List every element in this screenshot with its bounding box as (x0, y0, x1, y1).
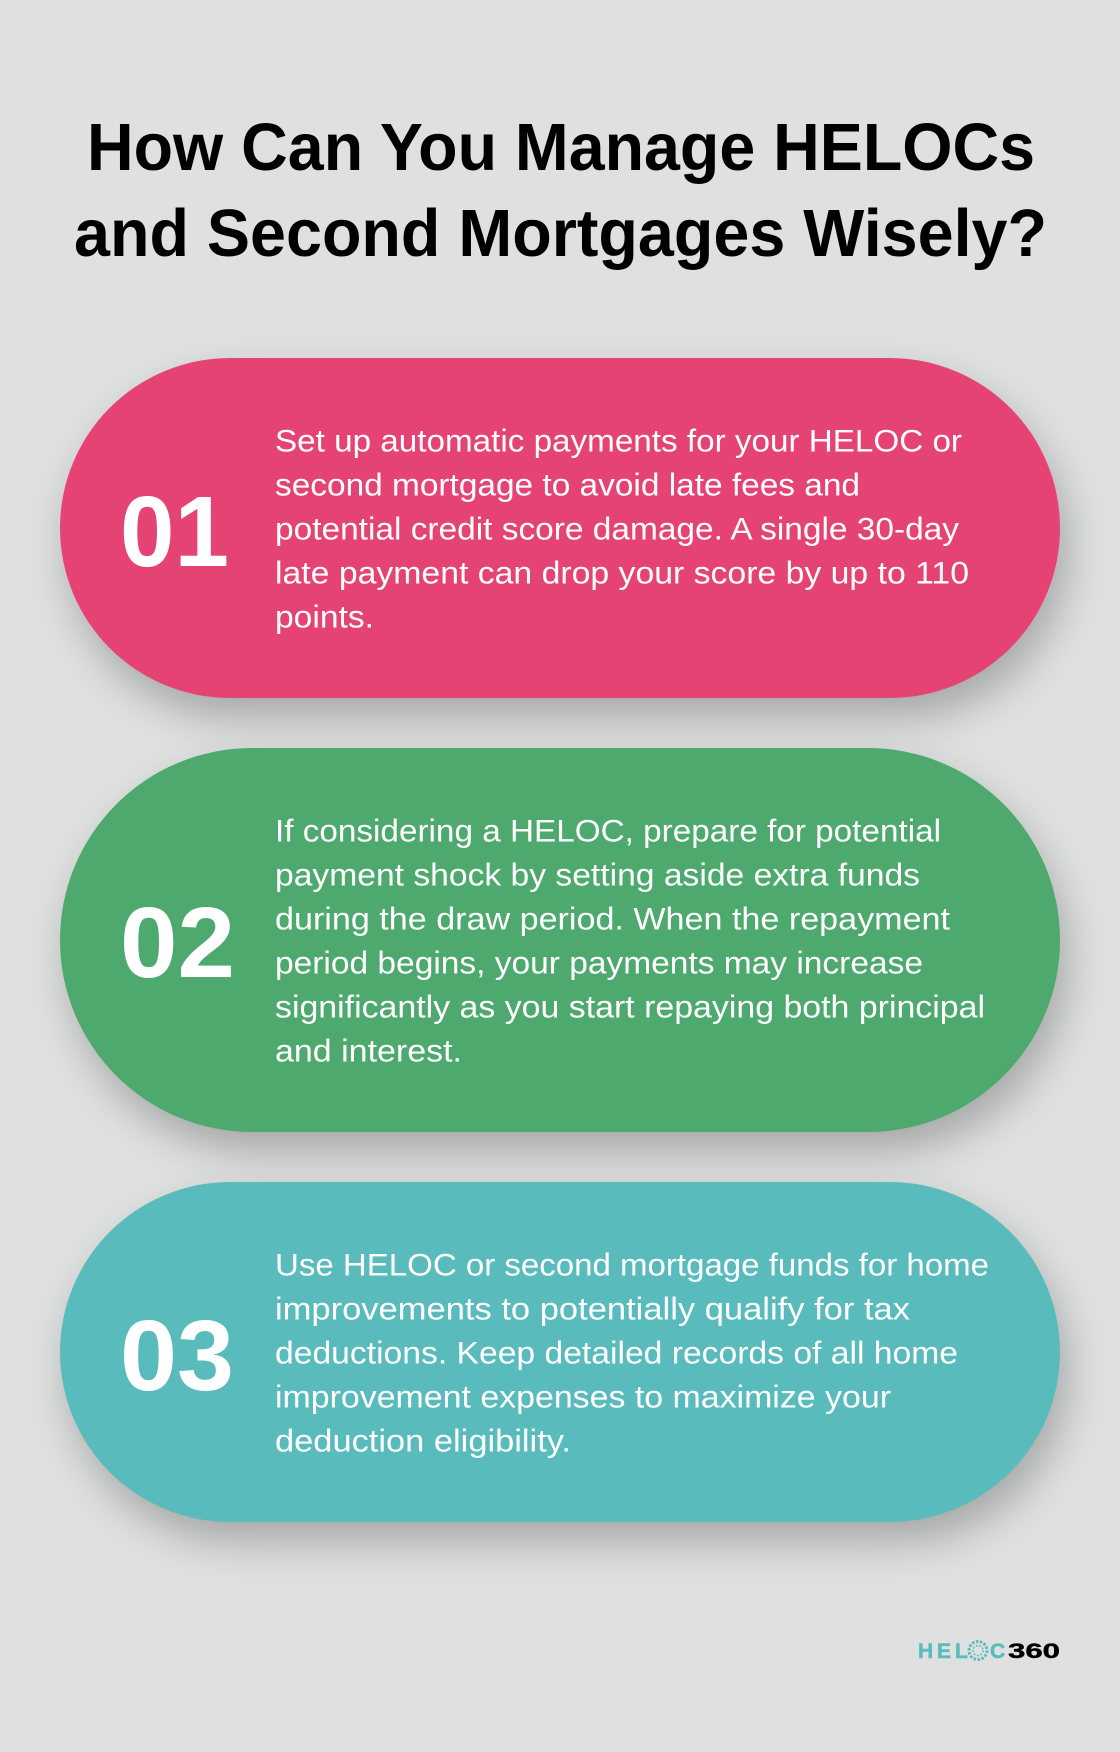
text block: step 02: significantly as you start repaying both principal (275, 989, 985, 1025)
text block: step 01: late payment can drop your score by up to 110 (275, 555, 969, 591)
text block: step 01: points. (275, 599, 374, 635)
text block: step 03: improvement expenses to maximize your (275, 1379, 891, 1415)
text block: step 03: Use HELOC or second mortgage funds for home (275, 1247, 989, 1283)
text block: step 03: improvements to potentially qualify for tax (275, 1291, 910, 1327)
text block: step 03: deduction eligibility. (275, 1423, 571, 1459)
pill background: step 03 (60, 1182, 1060, 1522)
logo: HELOC360: 360 (1008, 1640, 1060, 1663)
panel: step 01 (60, 358, 1060, 698)
number 01: 01 (120, 476, 229, 588)
text block: step 02: If considering a HELOC, prepare for potential (275, 813, 941, 849)
text block: step 02: during the draw period. When the repayment (275, 901, 950, 937)
text block: step 01: Set up automatic payments for your HELOC or (275, 423, 962, 459)
number 02: 02 (120, 887, 235, 999)
pill background: step 01 (60, 358, 1060, 698)
title (74, 110, 1047, 271)
title: How Can You Manage HELOCs (87, 110, 1035, 185)
text block: step 02: payment shock by setting aside extra funds (275, 857, 920, 893)
text block: step 01: potential credit score damage. A single 30-day (275, 511, 959, 547)
logo: HELOC360: HELO C (918, 1640, 1005, 1663)
text block: step 03: deductions. Keep detailed records of all home (275, 1335, 958, 1371)
panel: step 03 (60, 1182, 1060, 1522)
number 03: 03 (120, 1300, 234, 1412)
text block: step 01: second mortgage to avoid late fees and (275, 467, 860, 503)
text block: step 01 (275, 423, 969, 635)
panel: step 02 (60, 748, 1060, 1132)
text block: step 03 (275, 1247, 989, 1459)
text block: step 02 (275, 813, 985, 1069)
logo: HELOC360 (918, 1640, 1060, 1663)
icon: swirl O (969, 1642, 987, 1660)
text block: step 02: period begins, your payments may increase (275, 945, 923, 981)
text block: step 02: and interest. (275, 1033, 462, 1069)
title: and Second Mortgages Wisely? (74, 196, 1047, 271)
pill background: step 02 (60, 748, 1060, 1132)
